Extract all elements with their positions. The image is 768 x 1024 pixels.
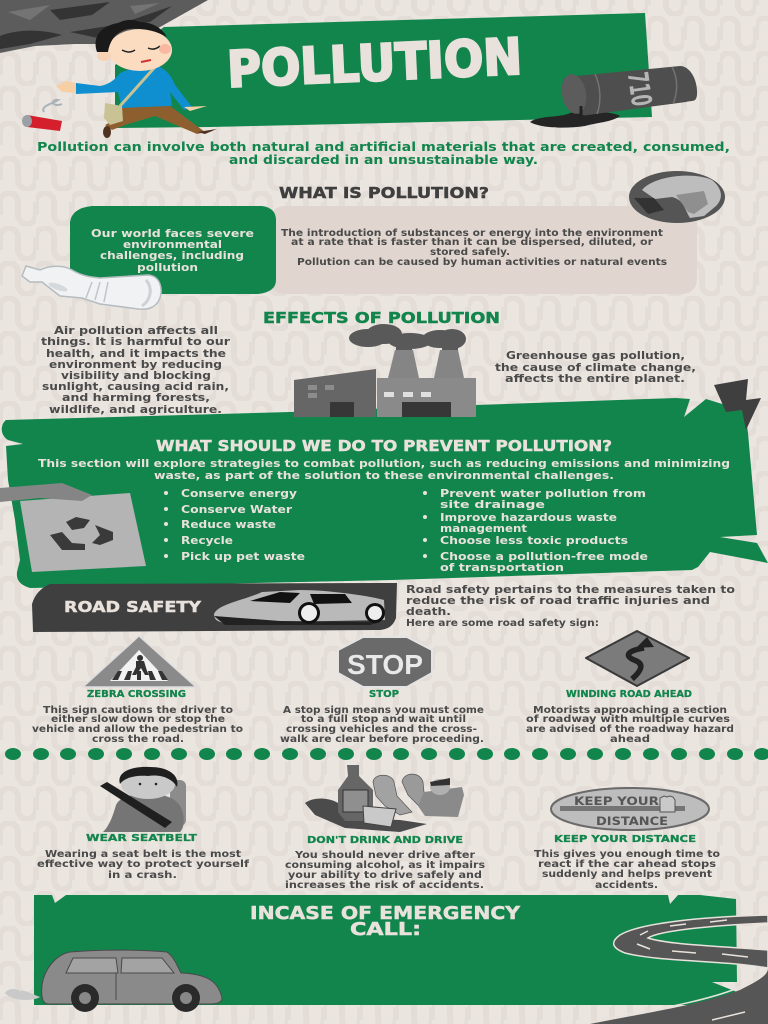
icon: stop sign — [338, 637, 432, 687]
dotted divider — [5, 748, 768, 760]
icon: oil barrel: 710 — [621, 70, 658, 108]
bullet list: right: of transportation — [440, 561, 564, 574]
text: drink description: You should never drive after — [294, 850, 475, 861]
tip: keep your distance — [534, 788, 720, 891]
label: keep distance: KEEP YOUR DISTANCE — [554, 834, 696, 845]
text: stop description: to a full stop and wait until — [301, 714, 466, 725]
label: stop: STOP — [369, 689, 399, 700]
text: drink description: your ability to drive safely and — [288, 870, 482, 881]
bullet list: left: Conserve Water — [181, 503, 293, 516]
icon: keep your distance badge: KEEP YOUR — [574, 794, 659, 808]
heading: emergency — [250, 904, 520, 940]
panel: emergency — [34, 895, 737, 1005]
icon: winding road sign — [586, 631, 689, 686]
panel: definition: at a rate that is faster than it can be dispersed, diluted, or — [291, 237, 653, 248]
sign: zebra crossing — [32, 636, 243, 745]
text: drink description: increases the risk of accidents. — [285, 880, 484, 891]
text: stop description: walk are clear before proceeding. — [280, 734, 484, 745]
icon: factory — [294, 324, 476, 417]
icon: keep your distance badge — [551, 788, 709, 830]
text: stop description — [280, 705, 484, 745]
text: seatbelt description: effective way to protect yourself — [37, 859, 250, 870]
bullet list: left — [164, 487, 305, 563]
text: zebra description: cross the road. — [92, 734, 184, 745]
text: air pollution: and harming forests, — [62, 391, 210, 404]
panel: definition: Pollution can be caused by human activities or natural events — [297, 257, 667, 268]
text: distance description — [534, 849, 720, 891]
heading: emergency: INCASE OF EMERGENCY — [250, 904, 520, 924]
subtitle: Pollution can involve both natural and artificial materials that are created, consumed, — [37, 140, 730, 154]
text: air pollution: wildlife, and agriculture. — [49, 403, 222, 416]
heading: road safety: ROAD SAFETY — [64, 598, 202, 616]
text: drink description: consuming alcohol, as it impairs — [285, 860, 485, 871]
heading: effects: EFFECTS OF POLLUTION — [263, 309, 500, 327]
text: winding description: Motorists approaching a section — [533, 705, 727, 716]
text: winding description: of roadway with multiple curves — [526, 714, 730, 725]
label: zebra crossing: ZEBRA CROSSING — [87, 689, 186, 700]
text: seatbelt description — [37, 849, 250, 881]
panel: world challenges: Our world faces severe — [91, 227, 254, 240]
text: stop description: crossing vehicles and the cross- — [286, 724, 477, 735]
text: stop description: A stop sign means you must come — [283, 705, 484, 716]
label: don't drink: DON'T DRINK AND DRIVE — [307, 835, 463, 846]
text: greenhouse gas: the cause of climate change, — [495, 361, 696, 374]
bullet list: left: Pick up pet waste — [181, 550, 305, 563]
text: air pollution — [41, 324, 231, 416]
tip: don't drink and drive — [285, 765, 485, 891]
panel: world challenges: pollution — [137, 261, 198, 274]
text: seatbelt description: in a crash. — [108, 870, 177, 881]
text: zebra description: vehicle and allow the pedestrian to — [32, 724, 243, 735]
bullet list: right: Improve hazardous waste — [440, 511, 617, 524]
bullet list: right: Choose less toxic products — [440, 534, 629, 547]
intro text — [38, 457, 730, 482]
text: road safety description: reduce the risk of road traffic injuries and — [406, 594, 710, 607]
text: zebra description: This sign cautions the driver to — [43, 705, 233, 716]
rock texture corner — [0, 0, 208, 53]
icon: recycle bag with hand — [0, 483, 146, 572]
subtitle — [37, 140, 730, 167]
panel: world challenges: environmental — [123, 238, 222, 251]
bullet list: right — [423, 487, 648, 574]
text: zebra description — [32, 705, 243, 745]
icon: car — [5, 950, 222, 1012]
icon: road — [590, 915, 768, 1024]
text: distance description: accidents. — [595, 880, 658, 891]
text: air pollution: environment by reducing — [49, 358, 222, 371]
section: effects of pollution — [41, 309, 696, 417]
icon: exhaust smoke — [5, 989, 40, 1000]
panel: definition: stored safely. — [430, 247, 510, 258]
bullet list: right: site drainage — [440, 498, 545, 511]
text: air pollution: sunlight, causing acid rain, — [42, 380, 229, 393]
heading: what is pollution: WHAT IS POLLUTION? — [279, 184, 489, 202]
panel: world challenges — [70, 206, 276, 294]
text: distance description: suddenly and helps prevent — [542, 869, 712, 880]
text: road safety description: Road safety pertains to the measures taken to — [406, 583, 735, 596]
text: air pollution: health, and it impacts the — [46, 347, 226, 360]
text: winding description: ahead — [610, 734, 650, 745]
sign: winding road — [526, 631, 734, 745]
banner: road safety — [32, 583, 397, 632]
text: air pollution: visibility and blocking — [61, 369, 211, 382]
text: greenhouse gas — [495, 349, 696, 385]
text: road safety description: death. — [406, 605, 451, 618]
text: air pollution: Air pollution affects all — [54, 324, 218, 337]
icon: oil barrel — [530, 66, 697, 128]
panel: world challenges: challenges, including — [100, 249, 244, 262]
sign: stop — [280, 637, 484, 745]
text: greenhouse gas: affects the entire planet. — [505, 372, 685, 385]
icon: boy littering — [56, 20, 217, 138]
text: road safety description: Here are some road safety sign: — [406, 618, 599, 629]
text: air pollution: things. It is harmful to our — [41, 335, 231, 348]
tip: wear seatbelt — [37, 767, 250, 881]
bullet list: left: Reduce waste — [181, 518, 276, 531]
subtitle: and discarded in an unsustainable way. — [229, 153, 538, 167]
icon: stop sign: STOP — [347, 649, 423, 680]
icon: lightning — [714, 379, 761, 430]
icon: plastic bottle — [22, 266, 161, 309]
bullet list: left: Recycle — [181, 534, 233, 547]
heading: emergency: CALL: — [350, 920, 421, 940]
icon: boy with seatbelt — [100, 767, 186, 832]
text: road safety description — [406, 583, 735, 629]
icon: earth globe — [629, 171, 725, 223]
icon: keep your distance badge: DISTANCE — [596, 814, 668, 828]
panel: prevent pollution — [2, 398, 768, 588]
text: winding description: are advised of the roadway hazard — [526, 724, 734, 735]
title banner — [115, 13, 652, 128]
intro text: waste, as part of the solution to these environmental challenges. — [154, 469, 614, 482]
title: POLLUTION — [226, 28, 523, 99]
text: greenhouse gas: Greenhouse gas pollution, — [506, 349, 685, 362]
text: drink description — [285, 850, 485, 891]
panel: definition — [270, 206, 697, 294]
bullet list: right: Prevent water pollution from — [440, 487, 646, 500]
text: zebra description: either slow down or stop the — [51, 714, 225, 725]
icon: sports car — [214, 590, 385, 625]
icon: zebra sign — [83, 636, 196, 687]
bullet list: right: Choose a pollution-free mode — [440, 550, 648, 563]
text: distance description: This gives you enough time to — [534, 849, 720, 860]
icon: bottle and hands — [305, 765, 464, 832]
bullet list: left: Conserve energy — [181, 487, 297, 500]
text: winding description — [526, 705, 734, 745]
label: wear seatbelt: WEAR SEATBELT — [86, 833, 197, 844]
panel: definition: The introduction of substances or energy into the environment — [281, 228, 663, 239]
text: seatbelt description: Wearing a seat belt is the most — [45, 849, 241, 860]
text: distance description: react if the car ahead stops — [538, 859, 716, 870]
bullet list: right: management — [440, 522, 527, 535]
intro text: This section will explore strategies to combat pollution, such as reducing emissions and minimizing — [38, 457, 730, 470]
heading: prevent pollution: WHAT SHOULD WE DO TO PREVENT POLLUTION? — [156, 437, 612, 455]
icon: soda can — [22, 100, 62, 131]
label: winding road: WINDING ROAD AHEAD — [566, 689, 692, 700]
